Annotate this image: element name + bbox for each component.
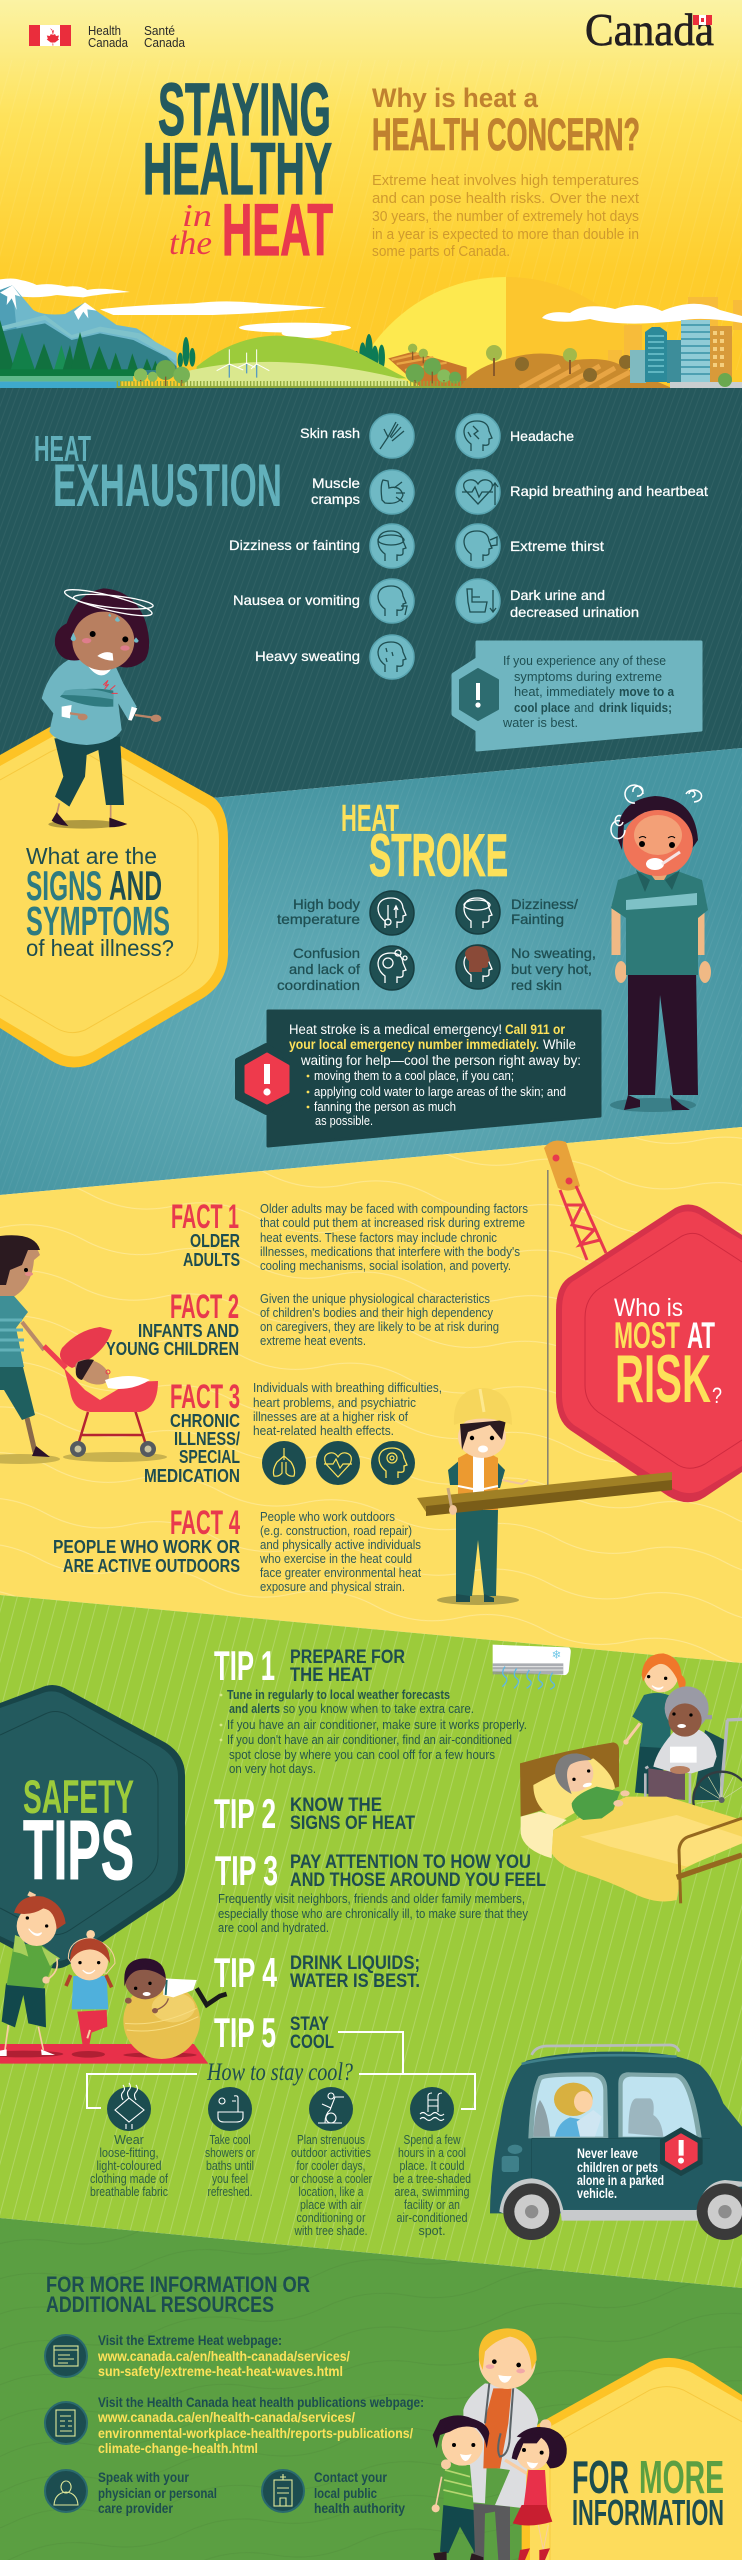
resource: physician: Speak with your	[98, 2470, 190, 2485]
column 1: loose-fitting,	[100, 2146, 158, 2160]
text: safety tips: SAFETY	[23, 1770, 134, 1823]
fact 3: chronic illness: MEDICATION	[144, 1466, 240, 1486]
fact 3: chronic illness: Individuals with breathing difficulties,	[253, 1381, 442, 1395]
column 4	[393, 2133, 471, 2238]
tip 2: know the signs of heat: KNOW THE	[290, 1795, 382, 1816]
fact 4: people who work outdoors: exposure and physical strain.	[260, 1580, 405, 1594]
callout: heat stroke emergency: Heat stroke is a medical emergency!	[289, 1022, 502, 1037]
title: Staying Healthy in the Heat: in	[182, 197, 212, 233]
section background: sky	[0, 0, 742, 392]
yoga mat	[0, 2044, 208, 2064]
title: Staying Healthy in the Heat	[143, 68, 333, 271]
resource: publications webpage: climate-change-health.html	[98, 2441, 258, 2456]
resource: publications webpage: environmental-workplace-health/reports-publications/	[98, 2426, 413, 2441]
labels: Skin rash	[300, 425, 360, 441]
girl	[505, 2419, 567, 2560]
heading: why is heat a health concern: Why is heat a	[372, 83, 539, 113]
callout: move to a cool place: heat, immediately	[514, 684, 615, 699]
resource: extreme heat webpage: Visit the Extreme Heat webpage:	[98, 2333, 282, 2348]
column 2	[205, 2133, 255, 2199]
illustration: man pushing stroller	[0, 1235, 167, 1464]
illustration: kids exercising	[0, 1893, 227, 2064]
labels: No sweating,	[511, 945, 596, 961]
logo: Health Canada signature: Santé	[144, 23, 175, 38]
fact 1: older adults: FACT 1	[171, 1198, 239, 1236]
logo: Canada wordmark: Canada	[585, 5, 714, 55]
labels: Dizziness or fainting	[229, 537, 360, 553]
resource icons	[45, 2335, 304, 2512]
heading: how to stay cool: How to stay cool?	[206, 2059, 353, 2086]
logo: Health Canada signature: Health	[88, 23, 121, 38]
text block: heat intro	[372, 173, 639, 260]
column 1: Wear	[114, 2133, 144, 2147]
labels: Rapid breathing and heartbeat	[510, 483, 708, 499]
title: Staying Healthy in the Heat: HEAT	[222, 190, 333, 271]
column 3	[290, 2133, 372, 2238]
section background: heat exhaustion	[0, 388, 742, 818]
labels: Nausea or vomiting	[233, 592, 360, 608]
fact 2: infants and young children: INFANTS AND	[138, 1321, 239, 1341]
illustration: construction worker with beam	[417, 1388, 672, 1605]
text: who is most at risk: Who is	[614, 1294, 683, 1322]
panel: who is most at risk hexagon	[556, 1204, 742, 1502]
heading: heat exhaustion: EXHAUSTION	[53, 452, 282, 519]
text: what are the signs and symptoms: SIGNS	[26, 862, 102, 909]
fact 3: chronic illness: ILLNESS/	[174, 1429, 240, 1449]
fact 2: infants and young children: FACT 2	[170, 1288, 239, 1326]
column 3: conditioning or	[296, 2211, 366, 2225]
illustration: stroller with baby	[44, 1327, 158, 1457]
logo: Health Canada signature: Canada	[144, 35, 186, 50]
left side of landscape	[0, 278, 473, 389]
text block: heat intro: in a year is expected to more than double in	[372, 227, 639, 243]
callout: heat stroke emergency: your local emergency number immediately.	[289, 1037, 539, 1052]
labels: temperature	[277, 911, 360, 927]
section background: heat stroke	[0, 748, 742, 1195]
column 4: be a tree-shaded	[393, 2172, 471, 2186]
text: what are the signs and symptoms: What are the	[26, 843, 157, 869]
fact 1: older adults: OLDER	[190, 1231, 240, 1251]
column 4: area, swimming	[394, 2185, 470, 2199]
resource: physician	[98, 2470, 217, 2516]
heading: heat exhaustion: HEAT	[34, 428, 91, 469]
section background: who is at risk	[0, 1127, 742, 1663]
column 3: location, like a	[298, 2185, 364, 2199]
fact 2: infants and young children: YOUNG CHILDREN	[106, 1339, 239, 1359]
how to stay cool items	[90, 2083, 471, 2238]
icons: left column	[370, 414, 414, 679]
boy	[432, 2415, 489, 2560]
labels: and lack of	[289, 961, 360, 977]
text: who is most at risk: MOST	[614, 1315, 680, 1356]
icons: lungs, heart, head	[262, 1441, 415, 1485]
symptoms: heat exhaustion list	[229, 414, 708, 679]
column 3: for cooler days,	[296, 2159, 366, 2173]
text: who is most at risk: ?	[712, 1383, 722, 1408]
bed and older man	[520, 1742, 742, 1903]
fact 4: people who work outdoors: (e.g. construction, road repair)	[260, 1524, 412, 1538]
illustration: air conditioner	[493, 1645, 571, 1689]
right cloud	[542, 304, 742, 324]
callout: move to a cool place	[454, 642, 701, 750]
heading: for more information or additional resources: ADDITIONAL RESOURCES	[46, 2292, 274, 2317]
icons	[370, 890, 500, 990]
text: never leave children or pets	[577, 2146, 664, 2201]
tip 1: prepare for the heat: If you don't have an air conditioner, find an air-conditioned	[227, 1733, 512, 1747]
heading: heat stroke	[341, 798, 508, 889]
heading: heat exhaustion	[34, 428, 282, 519]
fact 4: people who work outdoors: PEOPLE WHO WORK OR	[53, 1537, 240, 1557]
text: never leave children or pets: alone in a parked	[577, 2173, 664, 2188]
fact 1: older adults: heat events. These factors may include chronic	[260, 1231, 497, 1245]
column 4: hours in a cool	[398, 2146, 466, 2160]
fact 3: chronic illness: FACT 3	[170, 1378, 240, 1416]
icons: right column	[456, 414, 500, 623]
text: never leave children or pets: Never leave	[577, 2146, 638, 2161]
labels	[277, 896, 596, 993]
resource: physician: care provider	[98, 2501, 174, 2516]
tip 1: prepare for the heat	[214, 1642, 527, 1776]
distant buildings	[608, 297, 742, 364]
callout: move to a cool place: drink liquids;	[599, 700, 672, 715]
resource: publications webpage: Visit the Health Canada heat health publications webpage:	[98, 2395, 424, 2410]
labels	[229, 425, 708, 664]
column 3: with tree shade.	[294, 2224, 368, 2238]
callout: move to a cool place: symptoms during extreme	[514, 669, 662, 684]
panel: signs and symptoms hexagon	[0, 721, 228, 1068]
tip 3: pay attention: TIP 3	[215, 1847, 278, 1894]
fact 1: older adults: that could put them at increased risk during extreme	[260, 1216, 525, 1230]
fact 3: chronic illness: CHRONIC	[170, 1411, 240, 1431]
nurse	[623, 1653, 686, 1795]
tip 2: know the signs of heat: TIP 2	[214, 1790, 276, 1837]
fact 3: chronic illness: heat-related health effects.	[253, 1424, 394, 1438]
labels: Headache	[510, 428, 574, 444]
labels: High body	[293, 896, 360, 912]
tip 1: prepare for the heat: THE HEAT	[290, 1665, 372, 1686]
fact 2: infants and young children: on caregivers, they are likely to be at risk during	[260, 1320, 499, 1334]
text: for more information	[572, 2451, 724, 2533]
section background: more information	[0, 2218, 742, 2560]
doctor	[463, 2328, 538, 2560]
fact 1: older adults: Older adults may be faced with compounding factors	[260, 1202, 528, 1216]
column 2: showers or	[205, 2146, 255, 2160]
heading: heat stroke: HEAT	[341, 798, 399, 840]
resource: physician: physician or personal	[98, 2486, 217, 2501]
tip 1: prepare for the heat: Tune in regularly to local weather forecasts	[227, 1688, 450, 1702]
text block: heat intro: some parts of Canada.	[372, 244, 510, 260]
column 3: outdoor activities	[291, 2146, 371, 2160]
title: Staying Healthy in the Heat: HEALTHY	[143, 129, 332, 210]
callout: heat stroke emergency: as possible.	[315, 1114, 373, 1128]
fact 3: chronic illness: SPECIAL	[179, 1447, 240, 1467]
callout: heat stroke emergency: applying cold water to large areas of the skin; and	[314, 1085, 566, 1099]
resource: extreme heat webpage: www.canada.ca/en/health-canada/services/	[97, 2349, 350, 2364]
labels: Muscle	[312, 475, 360, 491]
illustration: woman with heat exhaustion	[42, 585, 161, 829]
tip 4: drink liquids: TIP 4	[214, 1949, 277, 1996]
icon: alert badge	[454, 660, 500, 729]
labels: Confusion	[293, 945, 360, 961]
text block: heat intro: 30 years, the number of extremely hot days	[372, 209, 639, 225]
panel: for more information hexagon and people	[432, 2328, 742, 2560]
text block: heat intro: and can pose health risks. Over the next	[372, 191, 639, 207]
icon: Canadian flag	[29, 25, 71, 46]
fact 3: chronic illness	[144, 1378, 442, 1486]
text: what are the signs and symptoms	[26, 843, 174, 961]
column 1: breathable fabric	[90, 2185, 168, 2199]
column 4: Spend a few	[404, 2133, 461, 2147]
connector lines: how to stay cool	[87, 2032, 475, 2109]
tip 1: prepare for the heat: If you have an air conditioner, make sure it works properly.	[227, 1718, 527, 1732]
fact 3: chronic illness: illnesses are at a higher risk of	[253, 1410, 408, 1424]
labels: red skin	[511, 977, 562, 993]
callout: heat stroke emergency	[237, 1011, 600, 1146]
labels: decreased urination	[510, 604, 639, 620]
tip 3: pay attention: Frequently visit neighbors, friends and older family members,	[218, 1892, 525, 1906]
fact 2: infants and young children: extreme heat events.	[260, 1334, 366, 1348]
younger girl	[66, 1930, 115, 2045]
fact 4: people who work outdoors: and physically active individuals	[260, 1538, 421, 1552]
callout: move to a cool place: cool place	[514, 700, 570, 715]
fact 1: older adults: cooling mechanisms, social isolation, and poverty.	[260, 1259, 511, 1273]
heading: for more information or additional resources	[46, 2272, 310, 2317]
column 3: Plan strenuous	[297, 2133, 365, 2147]
column 3: place with air	[300, 2198, 362, 2212]
resource: public health authority: Contact your	[314, 2470, 388, 2485]
fact 2: infants and young children: Given the unique physiological characteristics	[260, 1292, 490, 1306]
illustration: air conditioner: ❄	[552, 1650, 561, 1662]
text: what are the signs and symptoms: SYMPTOMS	[26, 898, 170, 944]
text block: heat intro: Extreme heat involves high temperatures	[372, 173, 639, 189]
labels: cramps	[311, 491, 360, 507]
city buildings	[630, 320, 742, 389]
callout: heat stroke emergency: Call 911 or	[505, 1022, 566, 1037]
callout: move to a cool place: If you experience any of these	[503, 653, 666, 668]
title: Staying Healthy in the Heat: the	[169, 225, 212, 262]
text: safety tips	[23, 1770, 134, 1897]
fact 1: older adults	[171, 1198, 528, 1273]
resource: extreme heat webpage: sun-safety/extreme-heat-heat-waves.html	[98, 2364, 343, 2379]
tip 4: drink liquids: DRINK LIQUIDS;	[290, 1953, 420, 1974]
callout: heat stroke emergency: waiting for help—cool the person right away by:	[300, 1053, 581, 1068]
older child	[0, 1893, 66, 2056]
illustration: man with heat stroke	[610, 785, 711, 1112]
callout: move to a cool place: and	[574, 700, 594, 715]
fact 4: people who work outdoors: FACT 4	[170, 1504, 240, 1542]
heading: heat stroke: STROKE	[369, 822, 508, 889]
labels: Fainting	[511, 911, 564, 927]
tip 3: pay attention: especially those who are chronically ill, to make sure that they	[218, 1907, 529, 1921]
tip 2: know the signs of heat	[214, 1790, 415, 1837]
symptoms: heat stroke list	[277, 890, 596, 993]
labels: Extreme thirst	[510, 538, 604, 554]
fact 4: people who work outdoors: ARE ACTIVE OUTDOORS	[63, 1556, 240, 1576]
tip 4: drink liquids: WATER IS BEST.	[290, 1971, 420, 1992]
logo: Health Canada signature: Canada	[88, 35, 129, 50]
tip 2: know the signs of heat: SIGNS OF HEAT	[290, 1813, 415, 1834]
heading: why is heat a health concern	[372, 83, 640, 160]
illustration: car with warning	[490, 2045, 742, 2240]
tip 1: prepare for the heat: TIP 1	[214, 1642, 275, 1689]
illustration: nurse, wheelchair and bed	[520, 1653, 742, 1903]
column 4: air-conditioned	[396, 2211, 468, 2225]
title: Staying Healthy in the Heat: STAYING	[158, 68, 331, 151]
icons	[107, 2087, 454, 2131]
brown hills	[460, 345, 672, 388]
tip 5: stay cool: TIP 5	[214, 2009, 276, 2056]
icon: red alert badge	[661, 2128, 702, 2175]
labels: coordination	[277, 977, 360, 993]
tip 1: prepare for the heat: and alerts	[229, 1702, 280, 1716]
tip 1: prepare for the heat: PREPARE FOR	[290, 1647, 405, 1668]
fact 2: infants and young children	[106, 1288, 499, 1359]
resource: publications webpage	[97, 2395, 424, 2456]
resource: public health authority: local public	[314, 2486, 377, 2501]
text: safety tips: TIPS	[23, 1803, 134, 1897]
boy on ball	[123, 1958, 227, 2059]
column 2: you feel	[212, 2172, 248, 2186]
column 2: Take cool	[210, 2133, 250, 2147]
sun	[372, 277, 630, 386]
column 4: facility or an	[404, 2198, 460, 2212]
icon: red alert badge	[237, 1045, 290, 1113]
column 3: or choose a cooler	[290, 2172, 372, 2186]
fact 4: people who work outdoors: who exercise in the heat could	[259, 1552, 412, 1566]
tip 1: prepare for the heat: on very hot days.	[229, 1762, 316, 1776]
resource: publications webpage: www.canada.ca/en/health-canada/services/	[97, 2410, 355, 2425]
text: never leave children or pets: children or pets	[577, 2160, 658, 2175]
column 2: baths until	[206, 2159, 254, 2173]
fact 1: older adults: ADULTS	[183, 1250, 240, 1270]
column 1	[90, 2133, 168, 2199]
text: who is most at risk	[614, 1294, 722, 1417]
column 4: spot.	[418, 2224, 446, 2238]
fact 4: people who work outdoors	[53, 1504, 421, 1594]
text: for more information: FOR	[572, 2451, 629, 2503]
tip 3: pay attention: PAY ATTENTION TO HOW YOU	[290, 1852, 531, 1873]
tip 1: prepare for the heat: spot close by where you can cool off for a few hours	[229, 1748, 495, 1762]
callout: heat stroke emergency: While	[543, 1037, 576, 1052]
resource: public health authority: health authority	[314, 2501, 405, 2516]
column 2: refreshed.	[208, 2185, 252, 2199]
labels: Heavy sweating	[255, 648, 360, 664]
callout: move to a cool place: move to a	[619, 684, 675, 699]
labels: Dark urine and	[510, 587, 605, 603]
panel: safety tips hexagon	[0, 1685, 185, 1969]
fact 2: infants and young children: of children's bodies and their high dependency	[260, 1306, 494, 1320]
callout: heat stroke emergency: moving them to a cool place, if you can;	[314, 1069, 514, 1083]
section background: safety tips	[0, 1595, 742, 2288]
resource: public health authority	[314, 2470, 405, 2516]
wheelchair and older woman	[645, 1686, 742, 1828]
text: what are the signs and symptoms: AND	[109, 862, 162, 909]
tip 1: prepare for the heat: so you know when to take extra care.	[283, 1702, 474, 1716]
logo: Health Canada signature	[29, 23, 186, 50]
labels: Dizziness/	[511, 896, 578, 912]
text: who is most at risk: AT	[687, 1315, 715, 1356]
fact 1: older adults: illnesses, medications that interfere with the body's	[260, 1245, 520, 1259]
resource: extreme heat webpage	[97, 2333, 350, 2379]
text: never leave children or pets: vehicle.	[577, 2186, 617, 2201]
heading: for more information or additional resources: FOR MORE INFORMATION OR	[46, 2272, 310, 2297]
fact 4: people who work outdoors: People who work outdoors	[260, 1510, 395, 1524]
tip 3: pay attention: are cool and hydrated.	[218, 1921, 329, 1935]
tip 4: drink liquids	[214, 1949, 420, 1996]
tip 5: stay cool: COOL	[290, 2032, 334, 2053]
tip 3: pay attention: AND THOSE AROUND YOU FEEL	[290, 1870, 546, 1891]
column 4: place. It could	[400, 2159, 465, 2173]
callout: move to a cool place: water is best.	[502, 715, 578, 730]
callout: heat stroke emergency: fanning the person as much	[314, 1100, 456, 1114]
icon glyphs	[378, 421, 498, 672]
column 1: light-coloured	[96, 2159, 162, 2173]
tip 5: stay cool: STAY	[290, 2014, 329, 2035]
labels: but very hot,	[511, 961, 592, 977]
fact 3: chronic illness: heart problems, and psychiatric	[253, 1396, 416, 1410]
illustration: landscape	[0, 277, 742, 388]
tip 3: pay attention	[215, 1847, 546, 1935]
column 1: clothing made of	[90, 2172, 168, 2186]
illustration: crane hook and lattice	[544, 1140, 606, 1485]
text: what are the signs and symptoms: of heat illness?	[26, 935, 174, 961]
fact 4: people who work outdoors: face greater environmental heat	[260, 1566, 421, 1580]
